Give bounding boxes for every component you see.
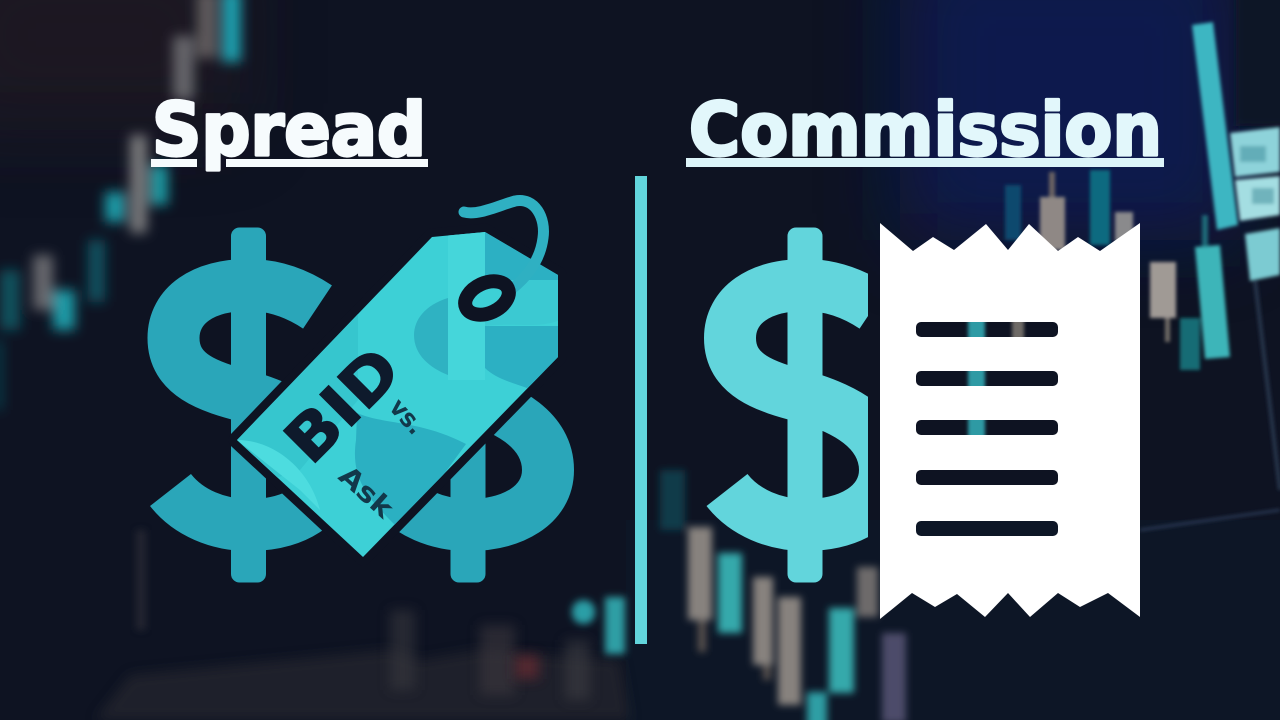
icon: receipt — [880, 223, 1140, 619]
divider — [635, 176, 647, 644]
blurred candlesticks: left rising trend — [0, 0, 241, 410]
tag text: Ask: Ask — [332, 460, 400, 525]
blurred candlesticks: upper right — [968, 22, 1238, 440]
data boxes on right edge — [1230, 127, 1280, 281]
tag hole and string — [460, 201, 543, 321]
heading: Spread: Spread — [152, 88, 426, 173]
icon: right dollar sign — [390, 228, 548, 582]
tag text: vs.: vs. — [384, 393, 431, 440]
icon: left dollar sign — [170, 228, 328, 582]
blurred candlesticks: lower centre — [572, 470, 906, 720]
spread icon: dollar signs and price tag — [170, 201, 565, 582]
heading: Commission: Commission — [689, 88, 1162, 173]
tag text: BID: BID — [270, 333, 415, 478]
icon: price tag — [230, 225, 565, 557]
icon: commission dollar sign — [727, 228, 885, 582]
